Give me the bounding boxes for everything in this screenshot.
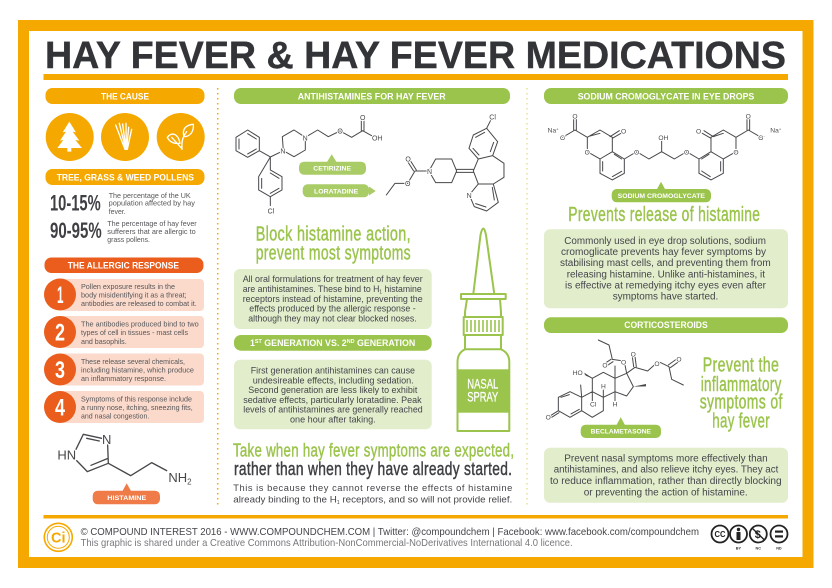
molecule: cetirizine: Cl: [268, 209, 275, 216]
heading: sodium cromoglycate: [544, 88, 788, 104]
icon: nasal spray: SPRAY: [467, 389, 499, 405]
headline: prevent inflammatory symptoms: inflammatory: [701, 374, 782, 396]
molecule: loratadine: O: [405, 157, 411, 164]
icon: compound interest logo: Ci: [51, 530, 66, 546]
step 2: 2: [55, 320, 65, 346]
text box: eye drop: Commonly used in eye drop solutions, sodium: [564, 236, 766, 247]
molecule: sodium cromoglycate: [548, 113, 782, 202]
heading: 1st vs 2nd generation: 1: [250, 338, 255, 348]
step 1: Pollen exposure results in the: [81, 282, 175, 291]
text box: generations: Second generation are less likely to exhibit: [248, 385, 418, 395]
step 3: 3: [55, 357, 65, 384]
stat: 10-15%: fever.: [109, 207, 126, 216]
text box: oral formulations: All oral formulations for treatment of hay fever: [243, 274, 423, 284]
step 2: [44, 316, 204, 348]
headline: take when symptoms expected: rather than when they have already started.: [234, 458, 512, 479]
text block: cannot reverse: [233, 483, 512, 506]
icons: creative commons: CC: [714, 530, 726, 539]
text box: generations: sedative effects, particularly loratadine. Peak: [243, 395, 422, 405]
text box: eye drop: cromoglicate prevents hay fever symptoms by: [561, 247, 766, 258]
molecule: sodium cromoglycate: +: [779, 126, 782, 131]
molecule: sodium cromoglycate: O: [634, 149, 639, 156]
molecule: histamine: [57, 432, 192, 504]
step 4: Symptoms of this response include: [81, 394, 192, 403]
molecule: cetirizine: O: [337, 129, 343, 136]
panel: corticosteroids: [544, 317, 788, 503]
stat: 90-95%: The percentage of hay fever: [107, 219, 197, 228]
heading: 1st vs 2nd generation: [234, 335, 432, 351]
molecule: histamine: N: [102, 432, 111, 447]
molecule: beclametasone: Cl: [590, 402, 597, 409]
text box: eye drop: symptoms have started.: [613, 291, 718, 302]
icons: creative commons: NC: [756, 546, 761, 550]
molecule: sodium cromoglycate: +: [556, 126, 559, 131]
headline: prevent inflammatory symptoms: Prevent the: [703, 355, 779, 377]
headline: block histamine: Block histamine action,: [256, 224, 411, 246]
molecule: sodium cromoglycate: OH: [658, 135, 668, 142]
molecule: loratadine: N: [427, 169, 432, 176]
headline: prevent inflammatory symptoms: symptoms of: [700, 391, 783, 413]
molecule: cetirizine: N: [303, 135, 308, 142]
text box: nasal symptoms: to reduce inflammation, rather than directly blocking: [550, 476, 782, 487]
icons: creative commons: BY: [736, 546, 742, 550]
headline: take when symptoms expected: Take when hay fever symptoms are expected,: [233, 440, 514, 461]
text block: cannot reverse: 1: [337, 500, 340, 506]
credits: © COMPOUND INTEREST 2016 - WWW.COMPOUNDCHEM.COM | Twitter: @compoundchem | Facebook: www.facebook.com/compoundchem: [81, 526, 699, 538]
label: sodium cromoglycate: [612, 182, 711, 202]
panel: the allergic response: [44, 258, 204, 504]
label: loratadine: [303, 184, 376, 197]
heading: allergic response: [44, 258, 204, 273]
heading: corticosteroids: CORTICOSTEROIDS: [624, 320, 708, 330]
molecule: beclametasone: O: [676, 357, 682, 364]
molecule: loratadine: Cl: [489, 114, 496, 121]
heading: allergic response: THE ALLERGIC RESPONSE: [68, 261, 179, 271]
text box: generations: First generation antihistamines can cause: [251, 365, 415, 375]
panel: antihistamines: [233, 88, 514, 506]
molecule: sodium cromoglycate: O: [585, 149, 590, 156]
heading: antihistamines: [234, 88, 510, 104]
step 2: The antibodies produced bind to two: [81, 320, 199, 329]
heading: antihistamines: ANTIHISTAMINES FOR HAY FEVER: [298, 91, 446, 101]
text box: eye drop: [544, 229, 788, 308]
heading: 1st vs 2nd generation: GENERATION VS. 2: [262, 338, 347, 348]
molecule: sodium cromoglycate: -: [565, 134, 567, 139]
label: histamine: HISTAMINE: [107, 495, 147, 502]
panel: the cause: [46, 88, 205, 244]
step 1: body misidentifying it as a threat;: [81, 290, 187, 300]
molecule: histamine: 2: [187, 478, 192, 487]
heading: the cause: [46, 88, 204, 104]
label: cetirizine: [299, 154, 366, 175]
heading: the cause: THE CAUSE: [101, 92, 149, 102]
icons: creative commons: [712, 526, 788, 550]
heading: pollens: [46, 169, 204, 185]
molecule: sodium cromoglycate: O: [696, 128, 701, 135]
molecule: histamine: NH: [168, 470, 187, 485]
text box: nasal symptoms: antihistamines, and also relieve itchy eyes. They act: [554, 465, 779, 476]
stat: 90-95%: grass pollens.: [107, 235, 150, 244]
text box: oral formulations: although they may not clear blocked noses.: [248, 314, 417, 324]
stat: 10-15%: [50, 191, 195, 216]
molecule: sodium cromoglycate: O: [572, 113, 578, 120]
molecule: beclametasone: O: [631, 352, 636, 359]
molecule: loratadine: O: [405, 181, 411, 188]
stat: 10-15%: The percentage of the UK: [109, 191, 191, 200]
credits: This graphic is shared under a Creative Commons Attribution-NonCommercial-NoDerivatives International 4.0 licence.: [81, 537, 573, 549]
text box: nasal symptoms: or preventing the action of histamine.: [584, 487, 748, 498]
text box: nasal symptoms: [544, 448, 788, 503]
text box: oral formulations: [234, 269, 432, 329]
text box: oral formulations: 1: [379, 290, 382, 296]
molecule: sodium cromoglycate: O: [560, 135, 565, 142]
text box: generations: one hour after taking.: [290, 414, 376, 424]
headline: block histamine: prevent most symptoms: [256, 242, 411, 264]
footer: [44, 515, 788, 551]
molecule: sodium cromoglycate: O: [621, 128, 626, 135]
label: loratadine: LORATADINE: [314, 188, 359, 195]
molecule: cetirizine: OH: [372, 135, 382, 142]
molecule: beclametasone: O: [602, 362, 608, 369]
icons: creative commons: $: [755, 529, 761, 541]
molecule: histamine: HN: [57, 447, 76, 462]
step 3: including histamine, which produce: [81, 366, 194, 375]
icons: creative commons: ND: [776, 546, 782, 550]
step 4: a runny nose, itching, sneezing fits,: [81, 403, 193, 412]
stat: 10-15%: population affected by hay: [109, 199, 195, 208]
molecule: sodium cromoglycate: O: [684, 149, 689, 156]
molecule: sodium cromoglycate: Na: [548, 128, 556, 135]
molecule: sodium cromoglycate: -: [763, 134, 765, 139]
step 3: an inflammatory response.: [81, 374, 166, 383]
heading: sodium cromoglycate: SODIUM CROMOGLYCATE IN EYE DROPS: [578, 91, 754, 101]
text box: oral formulations: are antihistamines. These bind to H: [243, 284, 389, 294]
step 4: and nasal congestion.: [81, 411, 149, 420]
text box: nasal symptoms: Prevent nasal symptoms more effectively than: [564, 453, 768, 464]
molecule: beclametasone: H: [613, 402, 618, 409]
credits: [81, 526, 699, 549]
text box: generations: undesireable effects, including sedation.: [253, 375, 414, 385]
label: cetirizine: CETIRIZINE: [313, 165, 352, 172]
text block: cannot reverse: receptors, and so will not provide relief.: [340, 495, 512, 505]
step 1: [44, 278, 204, 311]
text box: oral formulations: effects produced by the allergic response -: [249, 304, 416, 314]
molecule: cetirizine: [236, 115, 382, 216]
icon: nasal spray: [458, 228, 509, 431]
molecule: loratadine: N: [467, 193, 472, 200]
stat: 90-95%: sufferers that are allergic to: [107, 227, 196, 236]
icon: tree: [46, 113, 94, 161]
text box: generations: [234, 360, 432, 429]
step 2: types of cell in tissues - mast cells: [81, 328, 188, 337]
heading: corticosteroids: [544, 317, 788, 333]
molecule: beclametasone: O: [654, 361, 660, 368]
step 4: [44, 391, 204, 423]
text box: oral formulations: receptors instead of histamine, preventing the: [243, 294, 423, 304]
molecule: sodium cromoglycate: O: [746, 113, 751, 120]
text box: eye drop: releasing histamine. Unlike anti-histamines, it: [567, 269, 765, 280]
text box: generations: levels of antihistamines are generally reached: [243, 405, 423, 415]
heading: 1st vs 2nd generation: ND: [347, 339, 355, 345]
molecule: beclametasone: [546, 340, 683, 438]
step 1: 1: [57, 282, 64, 309]
text block: cannot reverse: This is because they cannot reverse the effects of histamine: [233, 483, 512, 493]
stat: 90-95%: 90-95%: [50, 218, 102, 243]
molecule: cetirizine: N: [280, 149, 285, 156]
molecule: sodium cromoglycate: Na: [770, 128, 779, 135]
molecule: cetirizine: O: [360, 115, 366, 122]
step 3: These release several chemicals,: [81, 357, 185, 366]
panel: sodium cromoglycate: [544, 88, 788, 308]
text box: eye drop: stabilising mast cells, and preventing them from: [560, 258, 771, 269]
molecule: beclametasone: HO: [573, 370, 583, 377]
heading: 1st vs 2nd generation: ST: [255, 339, 262, 345]
step 4: 4: [55, 394, 65, 422]
heading: 1st vs 2nd generation: GENERATION: [355, 338, 415, 348]
icon: nasal spray: NASAL: [467, 375, 498, 391]
text box: eye drop: is effective at remedying itchy eyes even after: [565, 281, 767, 292]
molecule: sodium cromoglycate: O: [758, 135, 763, 142]
molecule: beclametasone: O: [621, 359, 626, 366]
step 1: antibodies are released to combat it.: [81, 299, 197, 308]
headline: take when symptoms expected: [233, 440, 514, 479]
icon: compound interest logo: [44, 523, 72, 551]
step 3: [44, 354, 204, 386]
title: HAY FEVER & HAY FEVER MEDICATIONS: [45, 35, 786, 77]
text box: oral formulations: histamine: [382, 284, 422, 294]
molecule: sodium cromoglycate: O: [733, 149, 739, 156]
icon: grass: [101, 113, 149, 161]
label: beclametasone: BECLAMETASONE: [591, 429, 652, 436]
headline: block histamine: [256, 224, 411, 264]
icon: leaves: [157, 113, 205, 161]
stat: 90-95%: [50, 218, 197, 244]
label: sodium cromoglycate: SODIUM CROMOGLYCATE: [618, 193, 706, 200]
headline: prevent inflammatory symptoms: hay fever: [712, 410, 770, 432]
molecule: beclametasone: O: [546, 414, 551, 421]
text block: cannot reverse: already binding to the H: [233, 495, 332, 505]
headline: prevent inflammatory symptoms: [700, 355, 783, 432]
step 2: and basophils.: [81, 337, 127, 346]
stat: 10-15%: 10-15%: [50, 191, 101, 216]
heading: pollens: TREE, GRASS & WEED POLLENS: [57, 173, 194, 183]
molecule: loratadine: [303, 114, 504, 211]
molecule: beclametasone: H: [601, 384, 606, 391]
